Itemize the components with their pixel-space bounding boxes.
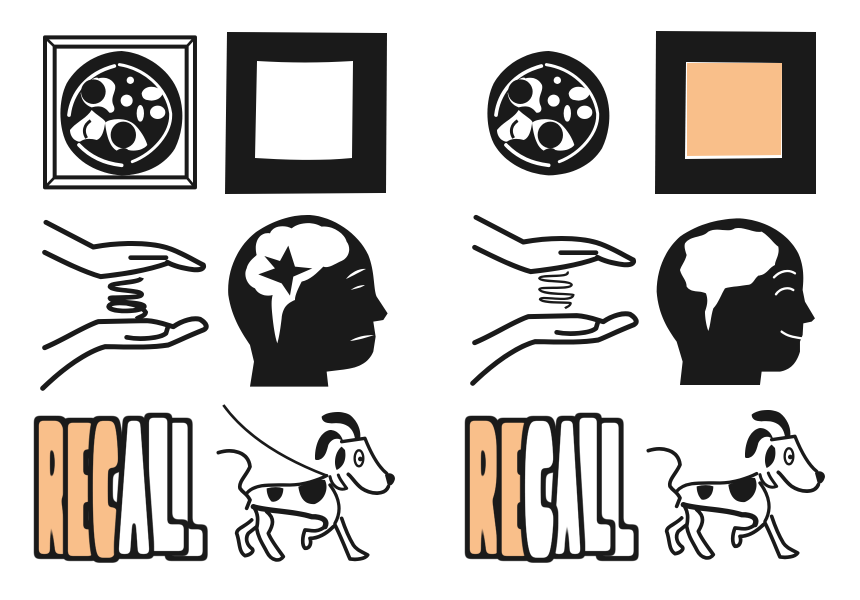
RECALL lettering, partly orange (40, 380, 198, 593)
RECALL lettering, less orange: L (583, 382, 606, 588)
star (258, 246, 312, 296)
brain (680, 228, 779, 331)
RECALL lettering, partly orange: R (40, 384, 65, 591)
hands with loose spring (473, 217, 636, 383)
RECALL lettering, less orange (470, 382, 629, 593)
head with star in brain (228, 215, 388, 387)
RECALL lettering, partly orange: L (152, 380, 179, 588)
RECALL lettering, less orange: L (604, 387, 629, 593)
brain (245, 223, 349, 343)
dog without leash (648, 410, 825, 558)
hands compressing a tight spring (43, 222, 206, 388)
leash (223, 405, 327, 476)
spring (109, 278, 146, 319)
RECALL lettering, partly orange: A (121, 384, 147, 591)
RECALL lettering, partly orange: L (173, 387, 198, 593)
pizza in box (45, 37, 195, 187)
RECALL lettering, less orange: E (506, 386, 522, 592)
black frame with orange centre (655, 31, 816, 194)
RECALL lettering, partly orange: E (72, 386, 88, 592)
spring (539, 272, 573, 308)
black frame with white centre (225, 32, 387, 194)
box frame (45, 37, 195, 187)
RECALL lettering, less orange: A (556, 385, 578, 591)
pizza alone (487, 51, 609, 175)
RECALL lettering, less orange: C (530, 386, 548, 592)
smiling head (657, 218, 815, 385)
brows and smile (774, 271, 802, 338)
dog on leash (218, 405, 395, 560)
RECALL lettering, partly orange: C (98, 386, 113, 592)
brows (346, 269, 374, 341)
RECALL lettering, less orange: R (470, 384, 496, 591)
